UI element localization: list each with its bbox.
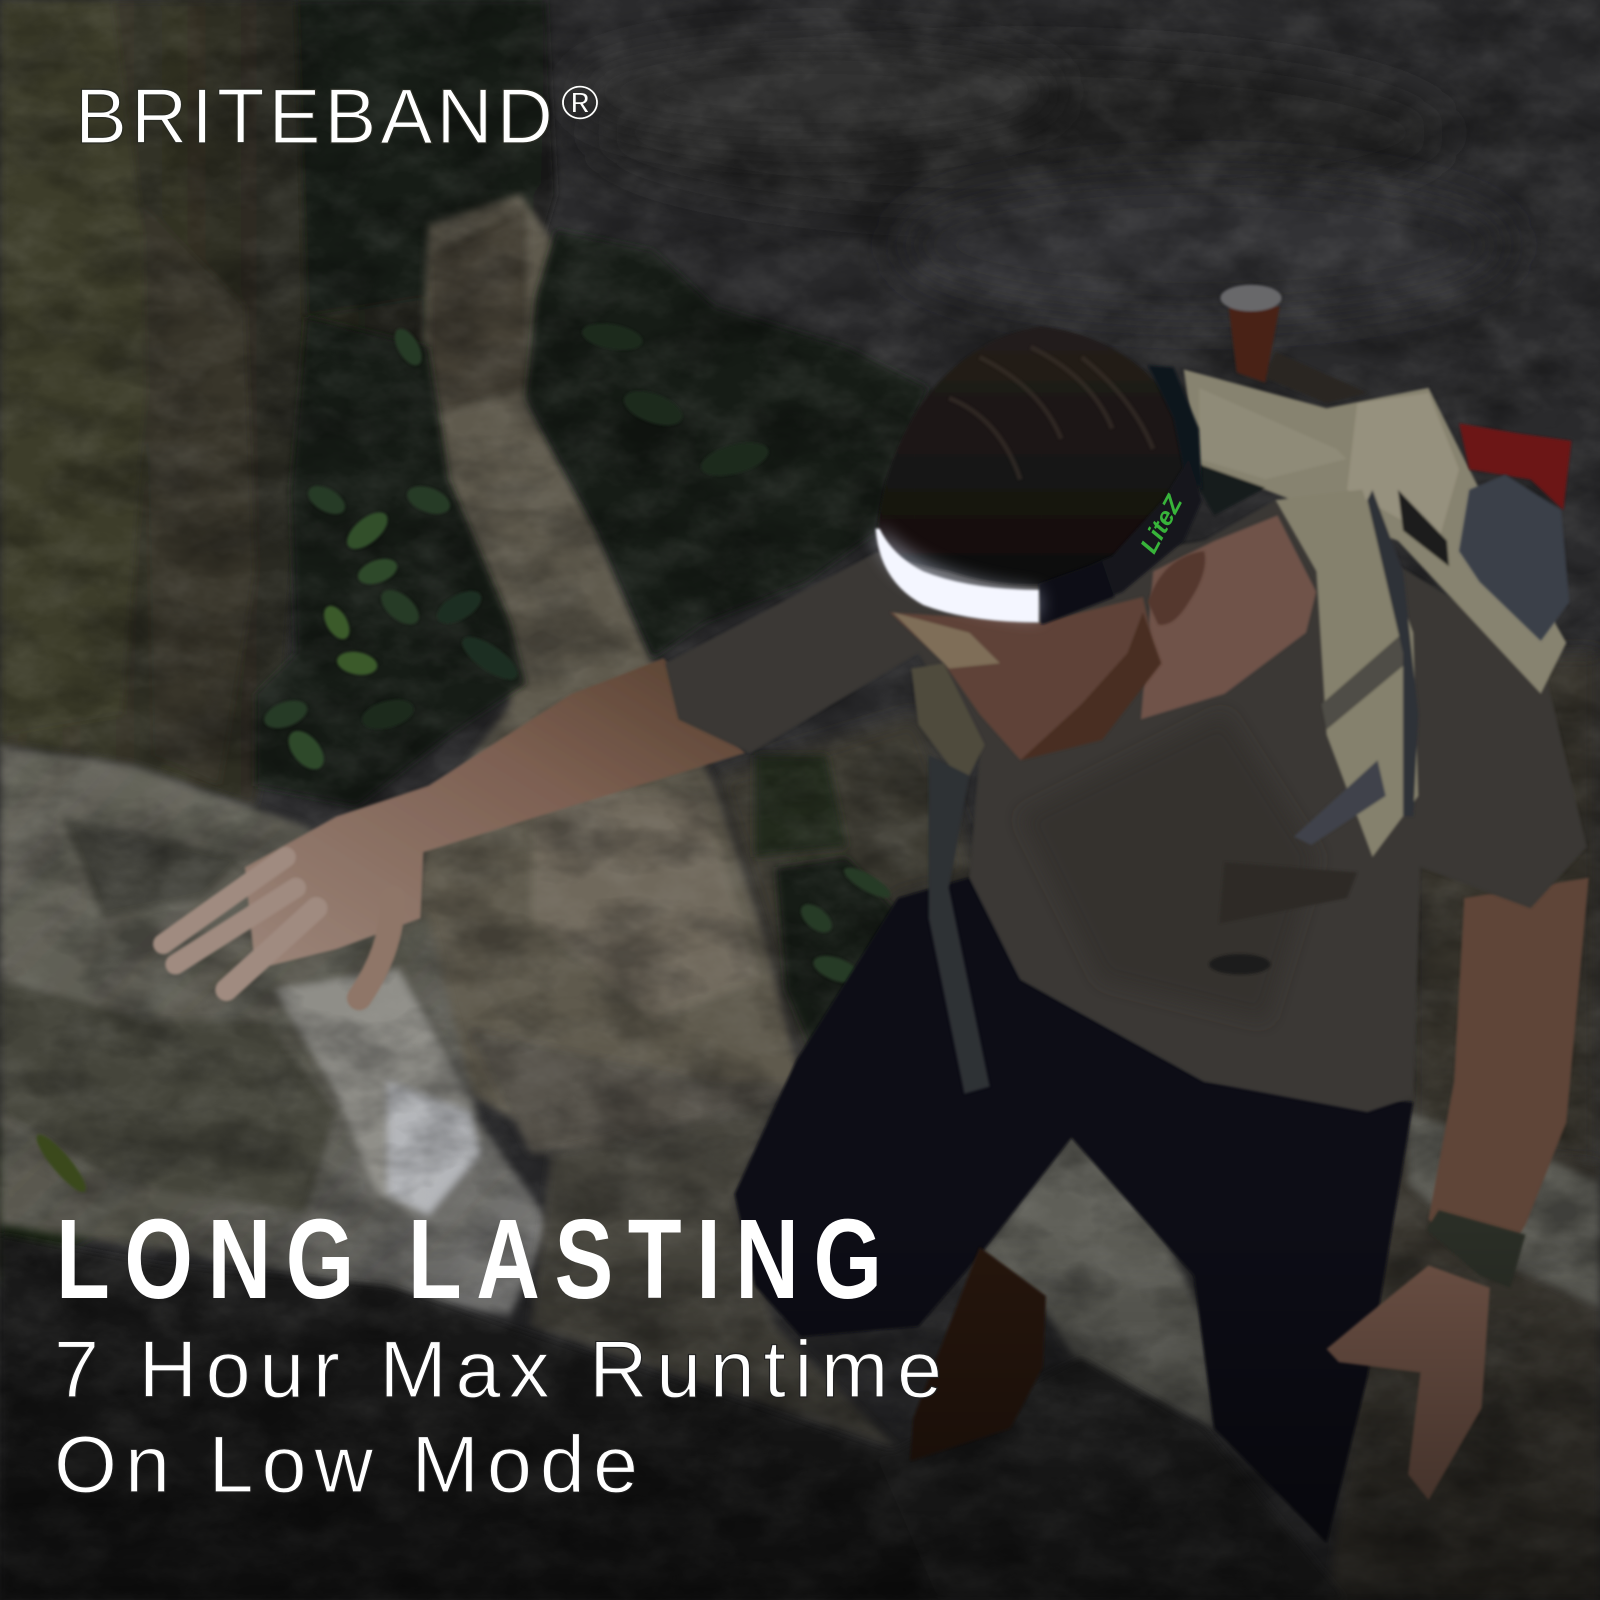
hair bbox=[877, 327, 1197, 585]
wooden handle strapped to pack bbox=[1220, 285, 1367, 403]
t-shirt bbox=[665, 500, 1587, 1112]
wristwatch bbox=[1427, 1210, 1526, 1288]
vegetation patches bbox=[0, 230, 929, 1286]
subheading: runtime: 7 Hour Max Runtime bbox=[54, 1325, 942, 1415]
face and beard bbox=[890, 597, 1161, 760]
lower right ground and central rock bbox=[531, 1102, 1600, 1600]
subheading: runtime bbox=[54, 1325, 942, 1510]
ear bbox=[1148, 551, 1205, 625]
dark foreground rocks bbox=[0, 1235, 1347, 1600]
headlamp glow bbox=[876, 529, 1039, 617]
heading: long lasting: LONG LASTING bbox=[56, 1197, 882, 1323]
trousers bbox=[735, 878, 1413, 1543]
shirt shading and pocket bbox=[1020, 714, 1357, 1020]
cliff wall with moss bbox=[0, 0, 556, 806]
brand name: ® bbox=[561, 77, 599, 130]
overall bottom shade bbox=[0, 1224, 1600, 1600]
headband logo: LiteZ bbox=[1136, 490, 1189, 558]
pale rock ledge bbox=[408, 194, 801, 1153]
near arm and hand on rock bbox=[163, 658, 745, 998]
large boulder under hand bbox=[0, 745, 551, 1316]
ivy leaves bbox=[31, 319, 894, 1197]
red enamel mug bbox=[1459, 423, 1571, 510]
subheading: runtime: On Low Mode bbox=[54, 1420, 638, 1510]
front harness strap bbox=[911, 663, 990, 1094]
neck bbox=[1141, 515, 1316, 719]
hiker bbox=[163, 285, 1589, 1543]
far arm and hand bbox=[1327, 878, 1589, 1500]
grey pack flap bbox=[1459, 474, 1569, 641]
brand name: BRITEBAND bbox=[75, 72, 553, 160]
backpack body bbox=[1184, 369, 1566, 857]
headband strap bbox=[1039, 365, 1202, 624]
boot bbox=[910, 1247, 1046, 1461]
headlamp light strip bbox=[876, 529, 1039, 622]
